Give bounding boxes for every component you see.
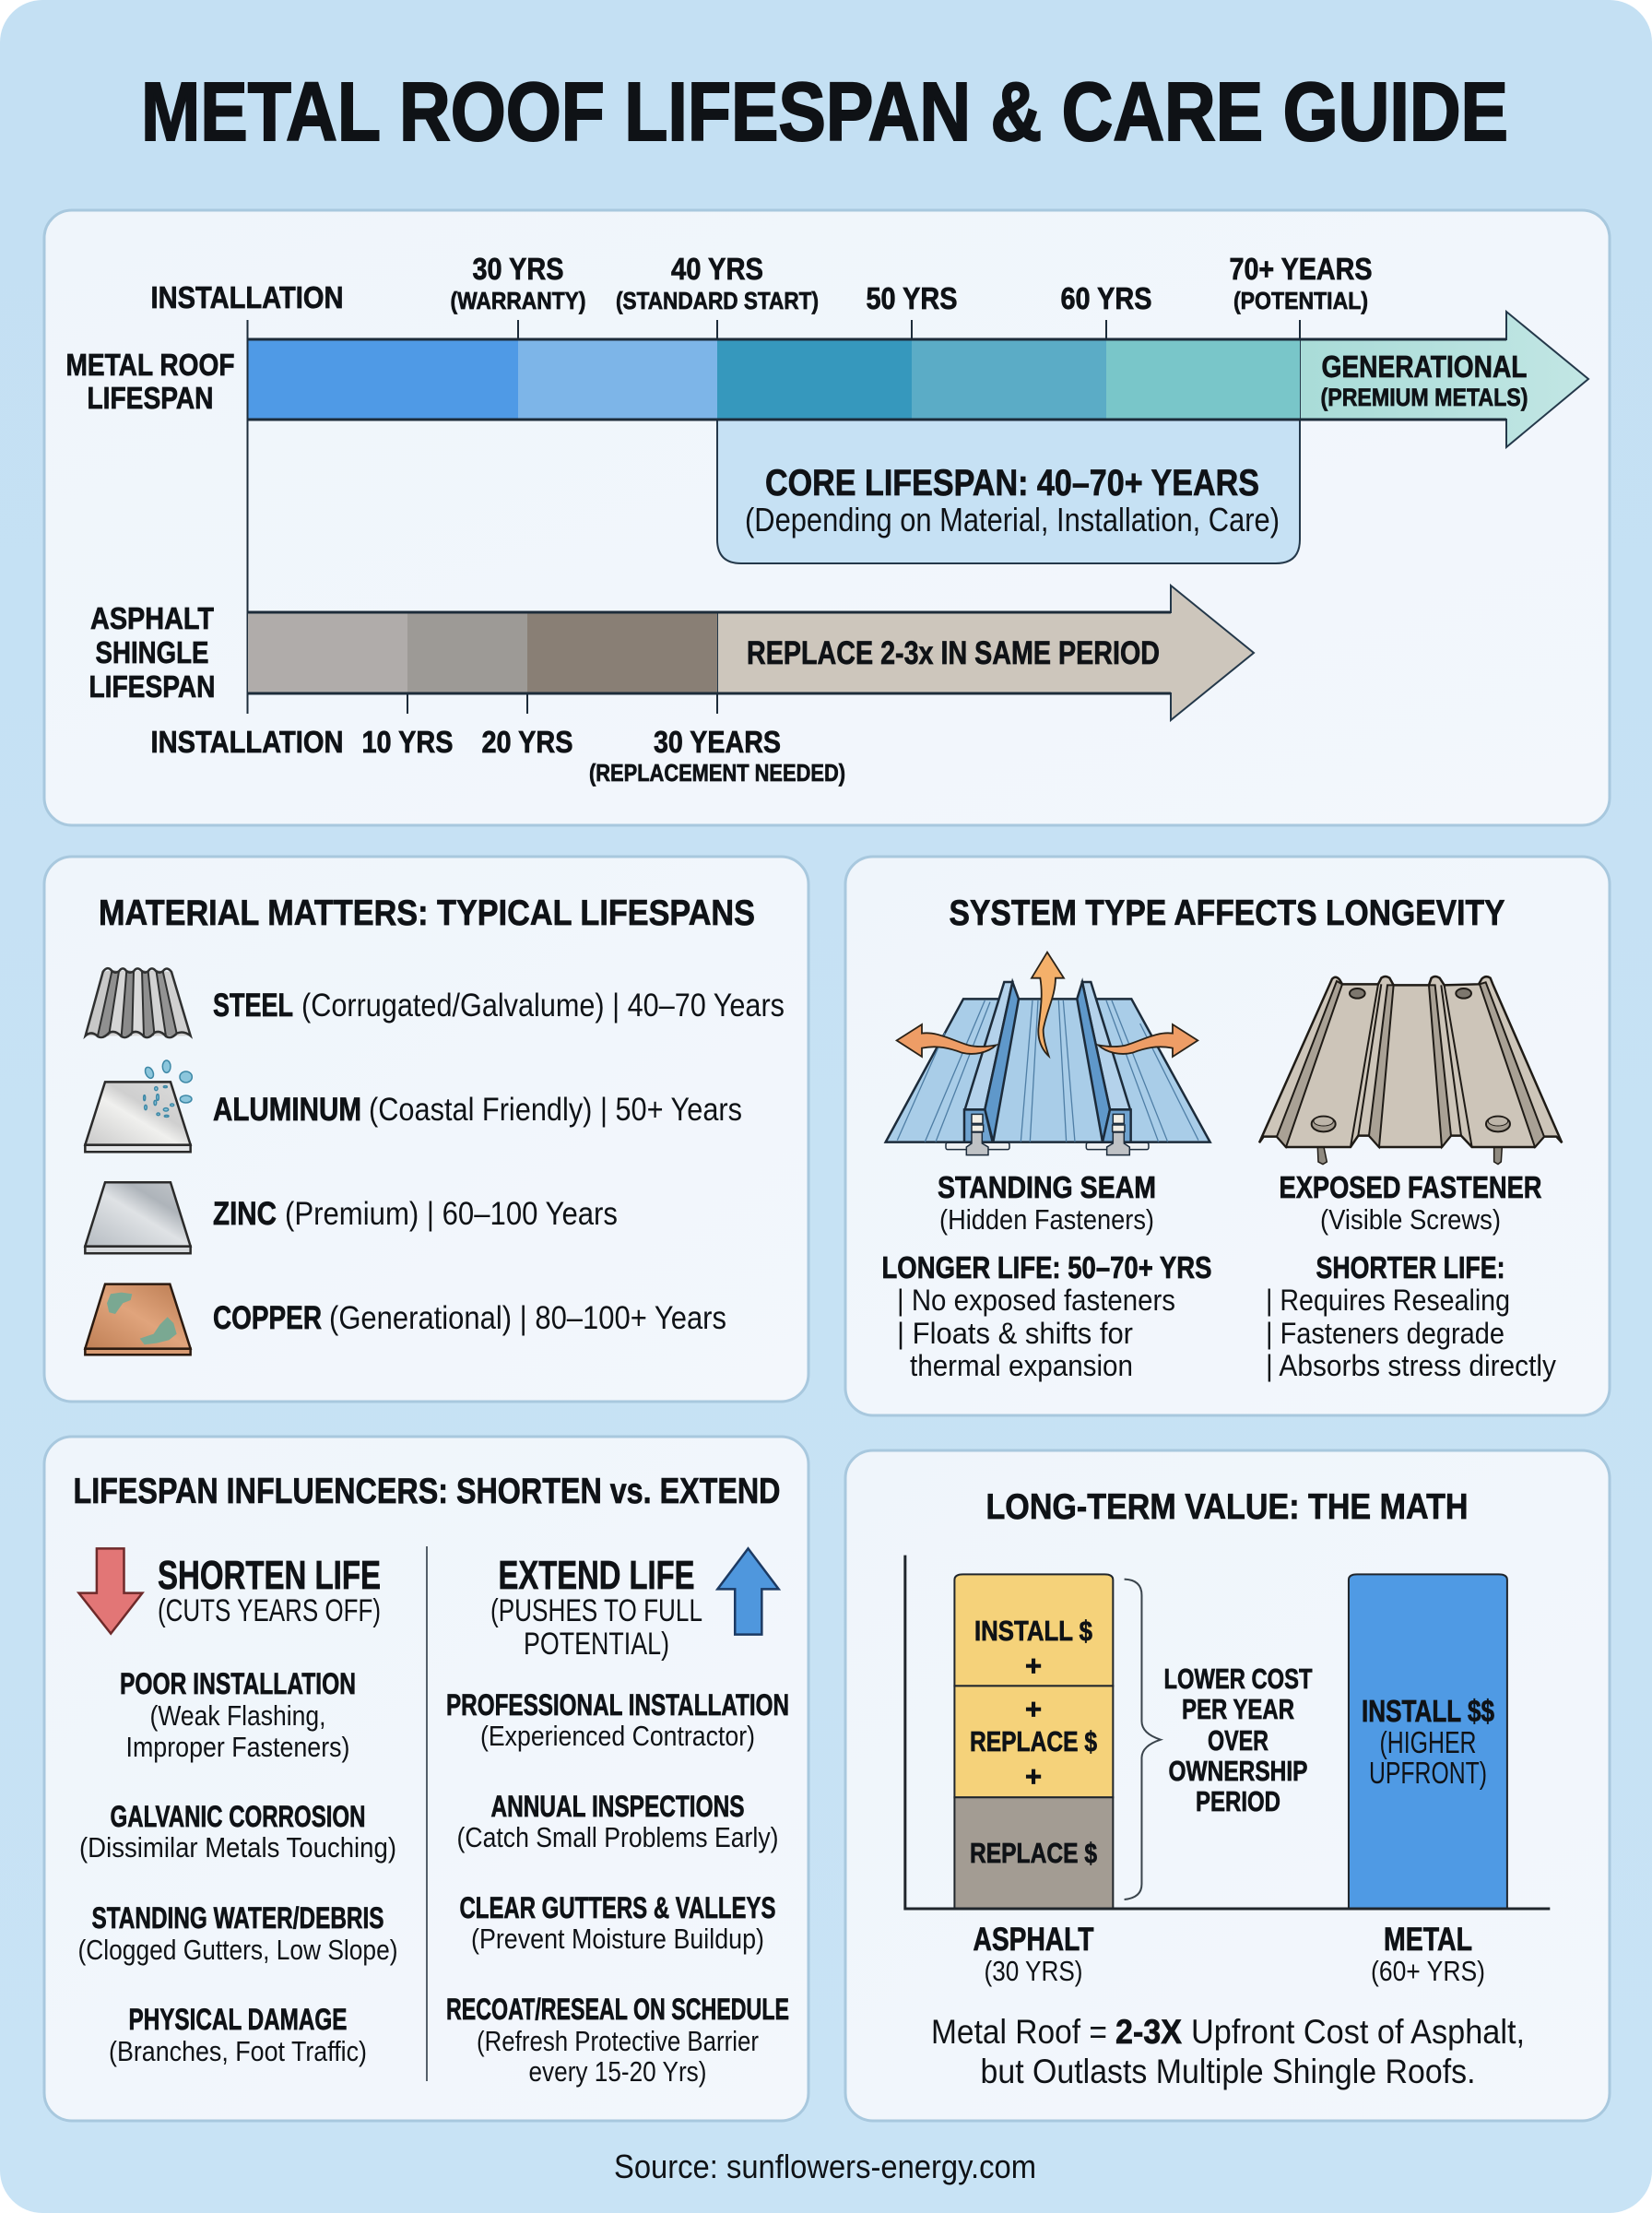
asphalt shingle labels: ASPHALT xyxy=(90,601,214,635)
metal roof timeline bar: GENERATIONAL xyxy=(1322,349,1527,384)
row: copper: COPPER xyxy=(213,1300,322,1336)
metal roof labels: 30 YRS xyxy=(472,252,564,286)
item: recoat reseal xyxy=(446,1993,789,2088)
metal roof labels: (STANDARD START) xyxy=(616,287,819,314)
item: annual inspections xyxy=(457,1790,778,1853)
icon: copper sheet xyxy=(85,1284,191,1355)
chart: cost stacked bars: REPLACE $ xyxy=(970,1725,1097,1757)
icon: standing seam roof xyxy=(886,953,1210,1155)
asphalt shingle timeline bar: REPLACE 2-3x IN SAME PERIOD xyxy=(747,635,1160,671)
callout: lower cost per year: OVER xyxy=(1208,1724,1268,1757)
column: standing seam: thermal expansion xyxy=(910,1349,1133,1382)
panel: lifespan timeline xyxy=(44,210,1610,825)
asphalt shingle labels: SHINGLE xyxy=(96,635,208,669)
panel: system type xyxy=(845,857,1610,1415)
callout: lower cost per year: PER YEAR xyxy=(1182,1693,1294,1725)
asphalt shingle labels: 10 YRS xyxy=(361,725,454,759)
item: professional installation xyxy=(446,1688,789,1752)
extend life header: EXTEND LIFE xyxy=(498,1553,695,1598)
shorten life header: SHORTEN LIFE xyxy=(158,1553,381,1598)
shorten life header xyxy=(158,1553,381,1628)
item: physical damage: (Branches, Foot Traffic) xyxy=(109,2035,367,2067)
metal roof labels: (WARRANTY) xyxy=(450,287,586,314)
summary text: Metal Roof = xyxy=(931,2013,1107,2051)
metal roof labels xyxy=(66,252,1372,415)
summary text xyxy=(931,2013,1525,2090)
summary text: Upfront Cost of Asphalt, xyxy=(1191,2013,1525,2051)
metal roof labels: INSTALLATION xyxy=(151,280,343,314)
panel: material matters xyxy=(44,857,808,1402)
chart: cost stacked bars: + xyxy=(1025,1760,1042,1793)
extend life header: POTENTIAL) xyxy=(524,1627,669,1662)
bar label: metal xyxy=(1371,1922,1485,1987)
item: clear gutters: (Prevent Moisture Buildup) xyxy=(471,1923,764,1955)
column: exposed fastener: SHORTER LIFE: xyxy=(1316,1250,1504,1284)
metal roof labels: 70+ YEARS xyxy=(1230,252,1372,286)
row: zinc: (Premium) | 60–100 Years xyxy=(285,1196,618,1232)
callout: lower cost per year: OWNERSHIP xyxy=(1169,1755,1307,1787)
item: poor installation xyxy=(120,1667,356,1763)
row: aluminum xyxy=(213,1092,742,1128)
item: recoat reseal: every 15-20 Yrs) xyxy=(529,2055,706,2088)
source line: Source: sunflowers-energy.com xyxy=(614,2148,1036,2185)
chart: cost stacked bars: + xyxy=(1025,1650,1042,1682)
metal roof labels: METAL ROOF xyxy=(66,348,234,382)
row: steel: STEEL xyxy=(213,988,293,1024)
callout: lower cost per year xyxy=(1163,1663,1313,1817)
column: standing seam xyxy=(881,1170,1211,1382)
heading: influencers: LIFESPAN INFLUENCERS: SHORTEN vs. EXTEND xyxy=(74,1472,780,1511)
heading: system type: SYSTEM TYPE AFFECTS LONGEVITY xyxy=(950,893,1504,933)
asphalt shingle labels: 30 YEARS xyxy=(654,725,781,759)
extend life header xyxy=(490,1553,702,1662)
core lifespan callout xyxy=(717,420,1300,563)
core lifespan callout: CORE LIFESPAN: 40–70+ YEARS xyxy=(765,463,1259,503)
column: exposed fastener xyxy=(1266,1170,1556,1382)
column: exposed fastener: (Visible Screws) xyxy=(1320,1203,1501,1236)
core lifespan callout: (Depending on Material, Installation, Care) xyxy=(745,501,1280,538)
bar label: metal: (60+ YRS) xyxy=(1371,1955,1485,1987)
panel: long-term value xyxy=(845,1450,1610,2121)
callout: lower cost per year: LOWER COST xyxy=(1163,1663,1313,1695)
item: clear gutters: CLEAR GUTTERS & VALLEYS xyxy=(459,1891,776,1924)
chart: cost stacked bars: INSTALL $$ xyxy=(1362,1694,1494,1728)
item: professional installation: (Experienced Contractor) xyxy=(480,1720,755,1752)
asphalt shingle labels xyxy=(88,601,845,787)
item: poor installation: (Weak Flashing, xyxy=(149,1699,326,1732)
icon: red down arrow xyxy=(79,1548,142,1634)
asphalt shingle labels: (REPLACEMENT NEEDED) xyxy=(589,759,845,787)
metal roof labels: (POTENTIAL) xyxy=(1233,287,1368,314)
chart: cost stacked bars: INSTALL $ xyxy=(974,1615,1092,1647)
item: recoat reseal: RECOAT/RESEAL ON SCHEDULE xyxy=(446,1993,789,2026)
icon: blue up arrow xyxy=(717,1548,779,1635)
summary text: but Outlasts Multiple Shingle Roofs. xyxy=(981,2053,1475,2090)
item: annual inspections: (Catch Small Problems Early) xyxy=(457,1821,778,1853)
item: galvanic corrosion xyxy=(79,1800,396,1864)
bar label: asphalt: ASPHALT xyxy=(974,1922,1093,1958)
item: poor installation: POOR INSTALLATION xyxy=(120,1667,356,1700)
heading: material matters: MATERIAL MATTERS: TYPICAL LIFESPANS xyxy=(99,893,755,933)
item: galvanic corrosion: GALVANIC CORROSION xyxy=(111,1800,365,1833)
bar label: metal: METAL xyxy=(1384,1922,1472,1958)
icon: corrugated steel xyxy=(86,968,191,1037)
metal roof labels: LIFESPAN xyxy=(87,381,214,415)
column: standing seam: STANDING SEAM xyxy=(938,1170,1156,1204)
asphalt shingle labels: LIFESPAN xyxy=(88,669,216,704)
column: standing seam: LONGER LIFE: 50–70+ YRS xyxy=(881,1250,1211,1284)
column: standing seam: | No exposed fasteners xyxy=(897,1284,1175,1317)
chart: cost stacked bars: UPFRONT) xyxy=(1369,1756,1487,1790)
chart: cost stacked bars: REPLACE $ xyxy=(970,1837,1097,1869)
row: aluminum: ALUMINUM xyxy=(213,1092,361,1128)
shorten life header: (CUTS YEARS OFF) xyxy=(158,1593,381,1628)
item: standing water: STANDING WATER/DEBRIS xyxy=(92,1901,384,1935)
summary text: 2-3X xyxy=(1115,2013,1182,2051)
item: clear gutters xyxy=(459,1891,776,1955)
chart: cost stacked bars: (HIGHER xyxy=(1379,1725,1477,1759)
item: galvanic corrosion: (Dissimilar Metals Touching) xyxy=(79,1831,396,1864)
column: standing seam: (Hidden Fasteners) xyxy=(939,1203,1154,1236)
column: standing seam: | Floats & shifts for xyxy=(897,1317,1133,1350)
item: standing water: (Clogged Gutters, Low Slope) xyxy=(77,1934,398,1966)
divider xyxy=(426,1546,428,2081)
bar label: asphalt xyxy=(974,1922,1093,1987)
row: copper: (Generational) | 80–100+ Years xyxy=(329,1300,726,1336)
row: aluminum: (Coastal Friendly) | 50+ Years xyxy=(369,1092,742,1128)
panel: lifespan influencers xyxy=(44,1437,808,2121)
column: exposed fastener: | Absorbs stress directly xyxy=(1266,1349,1556,1382)
item: annual inspections: ANNUAL INSPECTIONS xyxy=(490,1790,745,1823)
chart: cost stacked bars: + xyxy=(1025,1693,1042,1725)
column: exposed fastener: | Requires Resealing xyxy=(1266,1284,1510,1317)
row: zinc: ZINC xyxy=(213,1196,277,1232)
metal roof timeline bar: (PREMIUM METALS) xyxy=(1320,384,1528,411)
metal roof labels: 50 YRS xyxy=(867,281,957,315)
icon: zinc sheet xyxy=(85,1182,191,1253)
metal roof labels: 40 YRS xyxy=(671,252,763,286)
column: exposed fastener: | Fasteners degrade xyxy=(1266,1317,1504,1350)
icon: aluminum sheet xyxy=(85,1060,192,1152)
asphalt shingle labels: INSTALLATION xyxy=(151,725,343,759)
heading: long-term value: LONG-TERM VALUE: THE MATH xyxy=(986,1487,1468,1527)
item: recoat reseal: (Refresh Protective Barrier xyxy=(477,2025,759,2057)
item: physical damage: PHYSICAL DAMAGE xyxy=(129,2003,347,2036)
item: standing water xyxy=(77,1901,398,1966)
asphalt shingle timeline bar xyxy=(248,586,1254,720)
extend life header: (PUSHES TO FULL xyxy=(490,1593,702,1628)
item: poor installation: Improper Fasteners) xyxy=(125,1731,350,1763)
arrows: thermal movement xyxy=(897,953,1198,1057)
item: professional installation: PROFESSIONAL INSTALLATION xyxy=(446,1688,789,1722)
metal roof labels: 60 YRS xyxy=(1060,281,1152,315)
row: steel: (Corrugated/Galvalume) | 40–70 Years xyxy=(301,988,785,1024)
bar label: asphalt: (30 YRS) xyxy=(985,1955,1082,1987)
chart: cost stacked bars xyxy=(905,1556,1550,1909)
asphalt shingle labels: 20 YRS xyxy=(481,725,573,759)
metal roof timeline bar xyxy=(247,312,1588,714)
column: exposed fastener: EXPOSED FASTENER xyxy=(1280,1170,1542,1204)
item: physical damage xyxy=(109,2003,367,2067)
callout: lower cost per year: PERIOD xyxy=(1196,1785,1280,1817)
icon: exposed fastener roof xyxy=(1259,976,1562,1165)
